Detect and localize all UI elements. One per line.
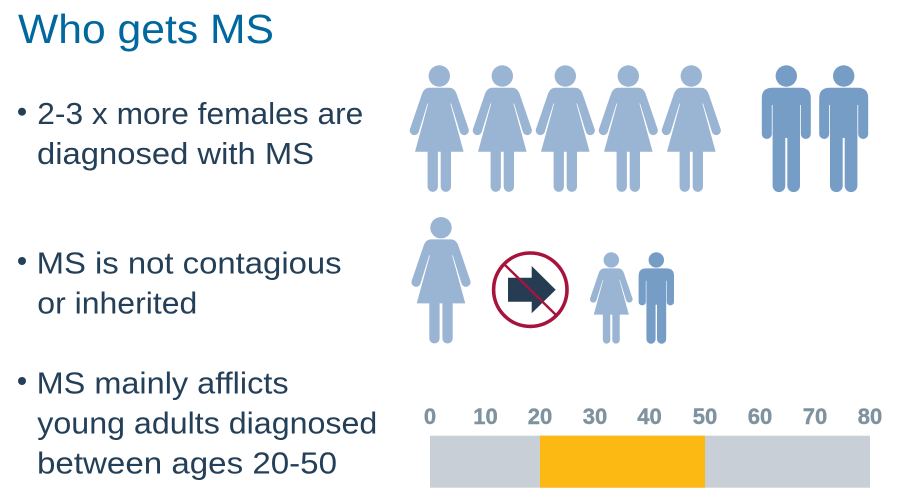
text block: not contagious xyxy=(18,245,342,320)
text block: young adults xyxy=(18,365,377,480)
axis labels: 30 xyxy=(583,404,607,429)
text block: females more often diagnosed xyxy=(18,96,363,171)
icon: child girl xyxy=(590,252,633,344)
text block: young adults: between ages 20-50 xyxy=(37,445,337,480)
highlighted range 20-50 xyxy=(540,436,705,488)
icon: mother xyxy=(411,217,471,344)
age range chart xyxy=(424,404,882,488)
text block: not contagious: MS is not contagious xyxy=(37,245,342,280)
axis labels: 40 xyxy=(637,404,662,429)
axis labels: 70 xyxy=(803,404,827,429)
axis labels xyxy=(424,404,882,429)
text block: not contagious: or inherited xyxy=(37,285,197,320)
age bar xyxy=(430,436,870,488)
pictogram: five women and two men xyxy=(410,65,868,192)
axis labels: 60 xyxy=(748,404,772,429)
text block: females more often diagnosed: 2-3 x more females are xyxy=(37,96,363,131)
icon: child boy xyxy=(639,252,674,344)
axis labels: 20 xyxy=(528,404,552,429)
text block: females more often diagnosed: diagnosed with MS xyxy=(37,136,314,171)
icon: prohibited arrow xyxy=(494,253,567,326)
pictogram: mother, no-transmission sign, children xyxy=(411,217,674,344)
axis labels: 0 xyxy=(424,404,436,429)
title: Who gets MS xyxy=(18,6,274,52)
axis labels: 10 xyxy=(473,404,498,429)
text block: young adults: young adults diagnosed xyxy=(37,405,377,440)
axis labels: 80 xyxy=(858,404,882,429)
text block: young adults: MS mainly afflicts xyxy=(37,365,289,400)
axis labels: 50 xyxy=(693,404,717,429)
